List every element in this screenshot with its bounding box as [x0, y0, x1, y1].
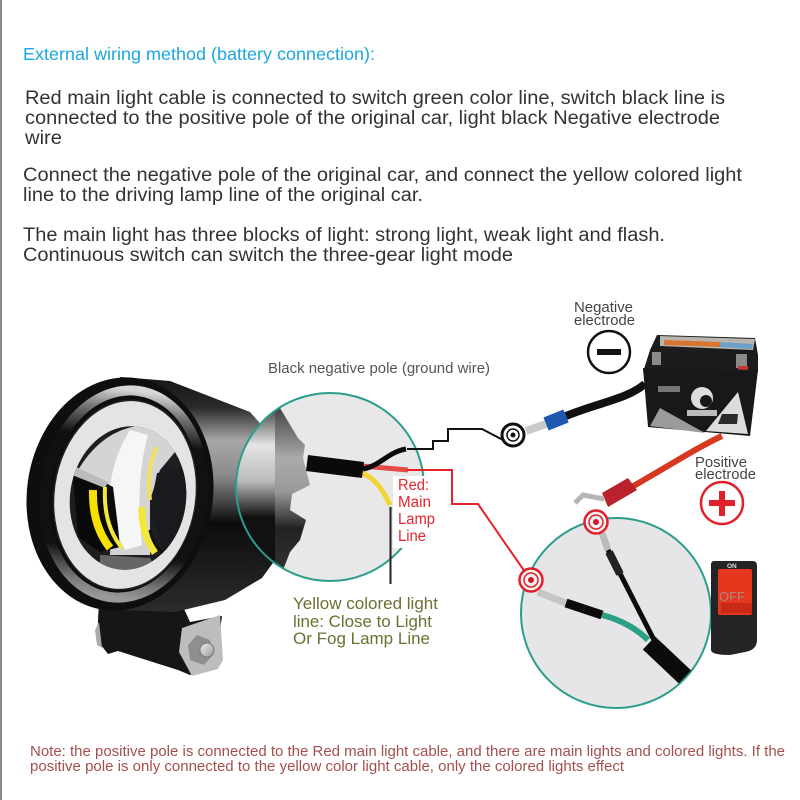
text block: wiring paragraph 1: wire	[24, 128, 62, 149]
note at bottom: positive pole is only connected to the yellow color light cable, only the colored lights effect	[30, 758, 625, 775]
text block: light modes paragraph: The main light has three blocks of light: strong light, weak light and flash.	[23, 225, 665, 246]
text block: light modes paragraph: Continuous switch can switch the three-gear light mode	[23, 245, 513, 266]
zoom circle: switch wires detail	[521, 518, 711, 708]
text block: wiring paragraph 1	[24, 88, 725, 149]
lamp housing	[120, 377, 275, 612]
text block: light modes paragraph	[23, 225, 665, 266]
icon: plus symbol	[701, 482, 743, 524]
battery	[643, 335, 758, 436]
label: negative electrode: electrode	[574, 312, 635, 329]
icon: target marker left	[520, 568, 542, 592]
text block: wiring paragraph 1: connected to the positive pole of the original car, light black Negative electrode	[25, 108, 720, 129]
LED lamp illustration	[12, 365, 275, 676]
label: positive electrode: electrode	[695, 466, 756, 483]
text block: wiring paragraph 2: Connect the negative pole of the original car, and connect the yellow colored light	[23, 165, 743, 186]
yellow wire in circle	[362, 473, 390, 505]
red wire in circle	[362, 466, 408, 470]
label: red main lamp line: Main	[398, 494, 431, 511]
icon: target marker top	[584, 510, 608, 534]
label: negative electrode	[574, 299, 635, 329]
black cable sheath	[649, 643, 685, 677]
icon: ground eyelet	[502, 424, 524, 446]
label: red main lamp line: Lamp	[398, 511, 435, 528]
lamp mounting bracket	[95, 600, 223, 676]
text block: wiring paragraph 1: Red main light cable is connected to switch green color line, switch black line is	[25, 88, 725, 109]
text block: wiring paragraph 2	[23, 165, 743, 206]
lamp bezel ring	[12, 365, 228, 623]
battery top	[643, 335, 758, 372]
label: yellow colored light line	[293, 594, 438, 648]
heading: External wiring method (battery connection):	[23, 44, 375, 64]
label: red main lamp line	[398, 477, 435, 545]
label: red main lamp line: Red:	[398, 477, 429, 494]
lamp halo ring	[41, 391, 209, 599]
rocker switch: OFF	[719, 589, 745, 604]
green switch wire	[538, 592, 648, 640]
label: negative electrode: Negative	[574, 299, 633, 316]
battery logo	[687, 387, 717, 416]
label: yellow colored light line: line: Close to Light	[293, 612, 432, 631]
label: positive electrode: Positive	[695, 454, 747, 471]
lamp lens	[70, 426, 186, 570]
note at bottom: Note: the positive pole is connected to the Red main light cable, and there are main lights and colored lights. If the	[30, 743, 785, 760]
red main lamp line	[407, 470, 525, 572]
label: red main lamp line: Line	[398, 528, 426, 545]
zoom circle: lamp wire detail	[235, 393, 424, 581]
lamp housing close-up	[237, 408, 310, 568]
positive battery cable with fork terminal	[575, 436, 722, 507]
label: positive electrode	[695, 454, 756, 483]
icon: minus symbol	[588, 331, 630, 373]
rocker switch	[711, 561, 757, 655]
label: black negative pole: Black negative pole (ground wire)	[268, 361, 490, 377]
leader line to yellow label	[390, 507, 392, 584]
rocker switch: ON	[727, 563, 737, 570]
note at bottom	[30, 743, 785, 775]
battery body	[643, 368, 758, 436]
negative battery cable with terminal	[526, 384, 645, 431]
label: yellow colored light line: Or Fog Lamp Line	[293, 629, 430, 648]
text block: wiring paragraph 2: line to the driving lamp line of the original car.	[23, 185, 423, 206]
label: yellow colored light line: Yellow colored light	[293, 594, 438, 613]
black switch wire	[602, 533, 654, 640]
black cable in circle	[307, 463, 363, 470]
black ground wire line	[407, 429, 503, 449]
white notch behind red label	[393, 476, 443, 548]
